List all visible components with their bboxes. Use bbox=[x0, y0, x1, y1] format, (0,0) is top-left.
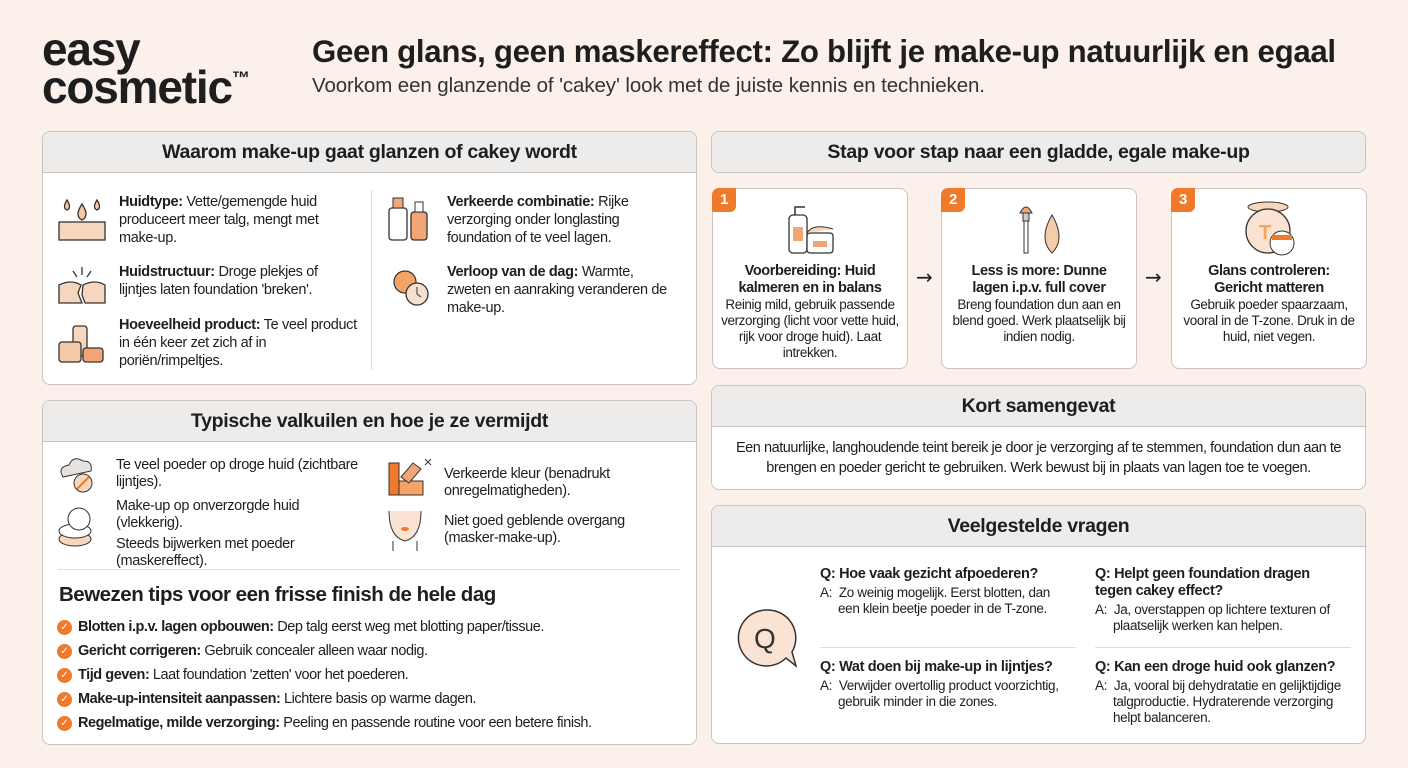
faq 3 bbox=[820, 659, 1059, 709]
step 1: Voorbereiding: Huid kalmeren en in balans bbox=[738, 263, 882, 296]
panel: faq bbox=[711, 505, 1366, 744]
text: combinatie: Verkeerde combinatie: Rijke verzorging onder longlasting foundation of te veel lagen. bbox=[447, 194, 629, 246]
heading: steps: Stap voor stap naar een gladde, egale make-up bbox=[827, 141, 1250, 163]
heading: summary: Kort samengevat bbox=[962, 395, 1115, 417]
faq 2 bbox=[1095, 566, 1330, 633]
arrow: → bbox=[1145, 265, 1161, 289]
text: pitfalls right: Verkeerde kleur (benadrukt onregelmatigheden). bbox=[444, 466, 610, 499]
heading: summary bbox=[712, 386, 1365, 427]
icon: cracked skin bbox=[58, 267, 106, 304]
divider bbox=[371, 190, 372, 370]
list: tips: Blotten i.p.v. lagen opbouwen: Dep talg eerst weg met blotting paper/tissue. bbox=[78, 619, 544, 635]
panel: causes bbox=[42, 131, 697, 385]
icon: products bbox=[58, 325, 104, 363]
faq 1: Q: Hoe vaak gezicht afpoederen? bbox=[820, 566, 1038, 582]
faq 1 bbox=[820, 566, 1050, 616]
subtitle: Voorkom een glanzende of 'cakey' look met de juiste kennis en technieken. bbox=[312, 74, 985, 97]
heading: faq: Veelgestelde vragen bbox=[948, 515, 1129, 537]
text: hoeveelheid: Hoeveelheid product: Te veel product in één keer zet zich af in poriën/rimpeltjes. bbox=[119, 317, 357, 369]
text: pitfalls left: Steeds bijwerken met poeder (maskereffect). bbox=[116, 536, 294, 569]
text: pitfalls right: Niet goed geblende overgang (masker-make-up). bbox=[444, 513, 625, 546]
list: tips: ✓ bbox=[60, 646, 69, 657]
heading: steps bbox=[711, 131, 1366, 173]
step 3: Gebruik poeder spaarzaam, vooral in de T-zone. Druk in de huid, niet vegen. bbox=[1183, 297, 1355, 344]
divider bbox=[58, 569, 680, 570]
icon: cleanser bbox=[788, 206, 834, 254]
icon: sun clock bbox=[393, 270, 429, 306]
title: Geen glans, geen maskereffect: Zo blijft je make-up natuurlijk en egaal bbox=[312, 34, 1336, 69]
faq 2: A: Ja, overstappen op lichtere texturen of plaatselijk werken kan helpen. bbox=[1095, 602, 1330, 633]
text: huidtype: Huidtype: Vette/gemengde huid produceert meer talg, mengt met make-up. bbox=[119, 194, 318, 246]
faq 4: Q: Kan een droge huid ook glanzen? bbox=[1095, 659, 1335, 675]
list: tips: ✓ bbox=[60, 622, 69, 633]
heading: causes bbox=[43, 132, 696, 173]
list: tips: Make-up-intensiteit aanpassen: Lichtere basis op warme dagen. bbox=[78, 691, 476, 707]
icon: compact: T bbox=[1259, 222, 1271, 244]
icon: color swatch bbox=[388, 458, 432, 496]
step 2 bbox=[941, 188, 1137, 369]
faq 3: A: Verwijder overtollig product voorzichtig, gebruik minder in die zones. bbox=[820, 678, 1059, 709]
list: tips: ✓ bbox=[60, 718, 69, 729]
step 1: 1 bbox=[720, 191, 728, 208]
step 1: Reinig mild, gebruik passende verzorging (licht voor vette huid, rijk voor droge huid). Laat intrekken. bbox=[721, 297, 899, 360]
step 2: 2 bbox=[949, 191, 957, 208]
step 3 bbox=[1171, 188, 1367, 369]
step 2: Breng foundation dun aan en blend goed. Werk plaatselijk bij indien nodig. bbox=[952, 297, 1126, 344]
faq 3: Q: Wat doen bij make-up in lijntjes? bbox=[820, 659, 1053, 675]
text: pitfalls right bbox=[444, 466, 625, 546]
heading: pitfalls: Typische valkuilen en hoe je ze vermijdt bbox=[191, 410, 548, 432]
text: pitfalls left: Make-up op onverzorgde huid (vlekkerig). bbox=[116, 498, 299, 531]
text: summary: Een natuurlijke, langhoudende teint bereik je door je verzorging af te stemmen, foundation dun aan te brengen en poeder gericht te gebruiken. Werk bewust bij in plaats van lagen toe te voegen. bbox=[736, 440, 1341, 476]
heading: tips: Bewezen tips voor een frisse finish de hele dag bbox=[59, 583, 496, 606]
list: tips: Regelmatige, milde verzorging: Peeling en passende routine voor een betere finish. bbox=[78, 715, 592, 731]
list: tips: Gericht corrigeren: Gebruik concealer alleen waar nodig. bbox=[78, 643, 428, 659]
list: tips: ✓ bbox=[60, 694, 69, 705]
heading: faq bbox=[712, 506, 1365, 547]
text: verloop: Verloop van de dag: Warmte, zweten en aanraking veranderen de make-up. bbox=[447, 264, 667, 316]
list: tips: Tijd geven: Laat foundation 'zetten' voor het poederen. bbox=[78, 667, 408, 683]
icon: skin drops bbox=[58, 198, 106, 241]
step 1 bbox=[712, 188, 908, 369]
logo: cosmetic™ bbox=[42, 61, 249, 113]
logo: easy bbox=[42, 23, 140, 75]
text: pitfalls left: Te veel poeder op droge huid (zichtbare lijntjes). bbox=[116, 457, 358, 490]
icon: Q bubble: Q bbox=[754, 623, 775, 654]
panel: summary bbox=[711, 385, 1366, 490]
heading: causes: Waarom make-up gaat glanzen of cakey wordt bbox=[162, 141, 577, 163]
icon: face bbox=[388, 511, 422, 551]
icon: Q bubble bbox=[738, 609, 798, 668]
icon: powder stack bbox=[58, 508, 92, 546]
panel: pitfalls and tips bbox=[42, 400, 697, 745]
logo bbox=[42, 23, 249, 113]
icon: powder cloud bbox=[60, 458, 92, 492]
list: tips bbox=[57, 619, 592, 731]
list: tips: ✓ bbox=[60, 670, 69, 681]
icon: brush sponge bbox=[1019, 206, 1060, 254]
faq 1: A: Zo weinig mogelijk. Eerst blotten, dan een klein beetje poeder in de T-zone. bbox=[820, 585, 1050, 616]
heading: pitfalls bbox=[43, 401, 696, 442]
step 3: Glans controleren: Gericht matteren bbox=[1208, 263, 1330, 296]
step 3: 3 bbox=[1179, 191, 1187, 208]
arrow: → bbox=[916, 265, 932, 289]
faq 4: A: Ja, vooral bij dehydratatie en gelijktijdige talgproductie. Hydraterende verzorging helpt balanceren. bbox=[1095, 678, 1341, 725]
icon: compact bbox=[1245, 202, 1294, 256]
divider bbox=[820, 647, 1076, 648]
icon: bottles bbox=[388, 198, 428, 241]
step 2: Less is more: Dunne lagen i.p.v. full cover bbox=[971, 263, 1107, 296]
text: huidstructuur: Huidstructuur: Droge plekjes of lijntjes laten foundation 'breken'. bbox=[119, 264, 318, 298]
text: pitfalls left bbox=[116, 457, 358, 569]
faq 2: Q: Helpt geen foundation dragen tegen cakey effect? bbox=[1095, 566, 1310, 599]
